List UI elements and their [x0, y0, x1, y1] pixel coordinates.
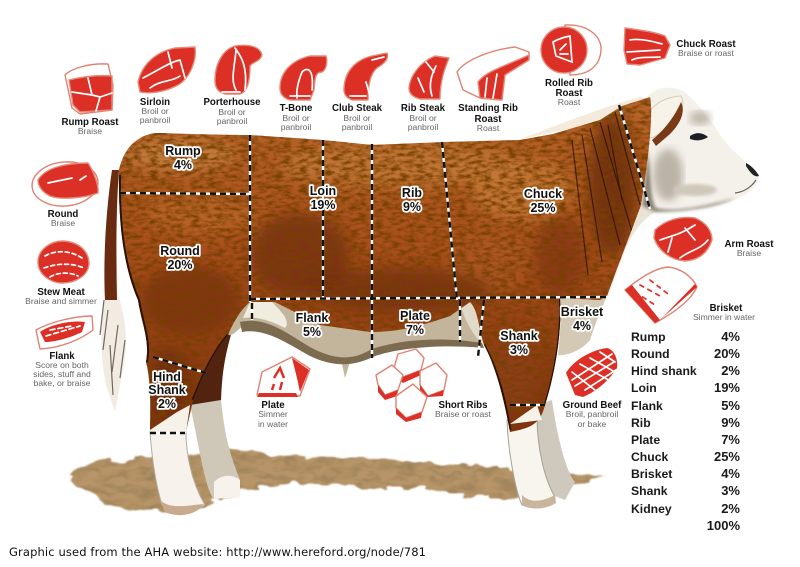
table: cut percentages: Plate — [631, 433, 660, 447]
icon: plate — [257, 357, 310, 397]
cow region labels: Plate — [400, 309, 430, 323]
label: arm roast — [724, 239, 774, 258]
icon: t-bone — [280, 56, 327, 100]
table: cut percentages: Round — [631, 347, 670, 361]
label: short ribs: Braise or roast — [435, 409, 492, 419]
white crest — [518, 97, 655, 140]
label: rib steak — [401, 103, 446, 132]
ear — [644, 96, 683, 138]
brisket chest — [558, 296, 607, 355]
cow region labels: 4% — [174, 158, 192, 172]
label: rib steak: Broil or — [409, 113, 437, 123]
cow region labels: Hind — [153, 370, 181, 384]
cow region labels: 7% — [406, 323, 424, 337]
table: cut percentages: Rib — [631, 416, 651, 430]
far hind leg — [190, 320, 235, 406]
cow region labels: Brisket — [561, 305, 604, 319]
source credit: Graphic used from the AHA website: http://www.hereford.org/node/781 — [9, 545, 426, 559]
label: porterhouse — [203, 97, 261, 126]
shin white front patch — [150, 405, 190, 433]
icon: stew meat — [38, 241, 89, 283]
cow region labels: 19% — [310, 198, 336, 212]
cow region labels: Shank — [148, 383, 186, 397]
cow region labels: Shank — [500, 329, 538, 343]
label: arm roast: Arm Roast — [724, 239, 774, 250]
head — [642, 88, 759, 212]
icon: club steak — [344, 53, 388, 100]
label: sirloin — [140, 97, 170, 125]
table: cut percentages: 4% — [721, 466, 740, 481]
cow region labels: Chuck — [524, 187, 562, 201]
label: porterhouse: panbroil — [217, 116, 247, 126]
cow region labels: 9% — [403, 200, 421, 214]
near front leg lower — [507, 415, 555, 506]
label: flank — [33, 351, 91, 388]
label: rump roast: Braise — [78, 126, 102, 136]
label: flank: Flank — [49, 351, 75, 362]
dashed cut lines — [120, 105, 650, 433]
icon: arm roast — [654, 218, 712, 261]
label: club steak: Broil or — [343, 113, 371, 123]
label: ground beef: Broil, panbroil — [566, 409, 618, 419]
label: arm roast: Braise — [737, 248, 761, 258]
chest white strip — [604, 205, 655, 296]
table: cut percentages — [631, 329, 740, 533]
icon: standing rib — [457, 47, 529, 100]
cow region labels: Loin — [310, 184, 336, 198]
label: plate: Simmer — [258, 409, 288, 419]
label: standing rib: Standing Rib — [458, 103, 518, 114]
table: cut percentages: 100% — [707, 518, 740, 533]
cow illustration — [100, 88, 759, 515]
table: cut percentages: Loin — [631, 381, 657, 395]
table: cut percentages: Flank — [631, 399, 663, 413]
belly underside — [228, 302, 482, 378]
label: short ribs — [435, 400, 492, 419]
cow region labels: 4% — [573, 319, 591, 333]
cow region labels: 20% — [167, 258, 193, 272]
table: cut percentages: 3% — [721, 483, 740, 498]
table: cut percentages: 5% — [721, 398, 740, 413]
label: chuck roast: Chuck Roast — [676, 39, 736, 50]
cow region labels: Rump — [165, 144, 201, 158]
table: cut percentages: Shank — [631, 484, 668, 498]
label: t-bone — [280, 103, 313, 132]
label: t-bone: panbroil — [281, 122, 311, 132]
label: porterhouse: Porterhouse — [203, 97, 261, 108]
label: rolled rib — [545, 78, 593, 107]
icon: rib steak — [409, 56, 449, 99]
label: plate: in water — [258, 419, 288, 429]
table: cut percentages: Brisket — [631, 467, 672, 481]
label: rib steak: Rib Steak — [401, 103, 446, 114]
table: cut percentages: 2% — [721, 501, 740, 516]
label: sirloin: Broil or — [141, 106, 169, 116]
label: ground beef: Ground Beef — [563, 400, 622, 411]
label: stew meat — [25, 287, 97, 306]
table: cut percentages: 7% — [721, 432, 740, 447]
label: chuck roast: Braise or roast — [678, 48, 735, 58]
label: chuck roast — [676, 39, 736, 58]
icon: rolled rib — [541, 25, 601, 75]
cow region labels: 5% — [303, 325, 321, 339]
icon: ground beef — [566, 348, 617, 397]
label: rolled rib: Rolled Rib — [545, 78, 593, 89]
label: rib steak: panbroil — [408, 122, 438, 132]
label: brisket — [693, 303, 755, 322]
label: ground beef — [563, 400, 622, 429]
table: cut percentages: 4% — [721, 329, 740, 344]
label: t-bone: T-Bone — [280, 103, 313, 114]
label: short ribs: Short Ribs — [439, 400, 487, 411]
label: sirloin: Sirloin — [140, 97, 170, 108]
label: rolled rib: Roast — [558, 97, 581, 107]
label: club steak: panbroil — [342, 122, 372, 132]
cow region labels: Round — [160, 244, 200, 258]
table: cut percentages: 19% — [714, 380, 740, 395]
label: ground beef: or bake — [578, 419, 607, 429]
label: stew meat: Stew Meat — [37, 287, 85, 298]
cow region labels — [148, 144, 604, 411]
label: club steak — [332, 103, 383, 132]
table: cut percentages: 9% — [721, 415, 740, 430]
label: brisket: Simmer in water — [693, 312, 755, 322]
label: standing rib: Roast — [475, 114, 502, 125]
label: t-bone: Broil or — [282, 113, 310, 123]
table: cut percentages: Hind shank — [631, 364, 697, 378]
label: porterhouse: Broil or — [218, 107, 246, 117]
near hind leg lower — [150, 432, 205, 512]
icon: short ribs — [376, 349, 447, 422]
label: round: Braise — [51, 218, 75, 228]
table: cut percentages: Rump — [631, 330, 666, 344]
label: plate: Plate — [261, 400, 285, 411]
label: round — [48, 209, 78, 228]
cow region labels: Rib — [402, 186, 422, 200]
label: rump roast: Rump Roast — [61, 117, 119, 128]
cow region labels: Flank — [296, 311, 328, 325]
body coat — [100, 90, 660, 440]
hoof — [160, 500, 204, 515]
label: standing rib — [458, 103, 518, 133]
icon: rump roast — [65, 64, 113, 114]
label: sirloin: panbroil — [140, 115, 170, 125]
cow region labels: 2% — [158, 397, 176, 411]
table: cut percentages: 25% — [714, 449, 740, 464]
label: flank: bake, or braise — [34, 378, 91, 388]
icon: flank — [36, 316, 93, 349]
cow region labels: 25% — [530, 201, 556, 215]
tail — [100, 170, 126, 412]
label: flank: sides, stuff and — [33, 369, 91, 379]
table: cut percentages: Kidney — [631, 502, 672, 516]
label: club steak: Club Steak — [332, 103, 383, 114]
icon: brisket — [625, 267, 697, 323]
label: round: Round — [48, 209, 78, 220]
icon: round — [30, 159, 100, 209]
ground patch — [68, 449, 604, 510]
cow region labels: 3% — [510, 343, 528, 357]
table: cut percentages: Chuck — [631, 450, 668, 464]
icon: sirloin — [138, 47, 195, 93]
label: standing rib: Roast — [477, 123, 500, 133]
label: stew meat: Braise and simmer — [25, 296, 97, 306]
label: rolled rib: Roast — [556, 88, 583, 99]
icon: chuck roast — [624, 28, 670, 65]
label: rump roast — [61, 117, 119, 136]
icon: porterhouse — [215, 45, 262, 94]
far front leg — [537, 400, 575, 500]
label: brisket: Brisket — [710, 303, 743, 314]
label: plate — [258, 400, 288, 429]
table: cut percentages: 2% — [721, 363, 740, 378]
label: flank: Score on both — [35, 360, 89, 370]
table: cut percentages: 20% — [714, 346, 740, 361]
